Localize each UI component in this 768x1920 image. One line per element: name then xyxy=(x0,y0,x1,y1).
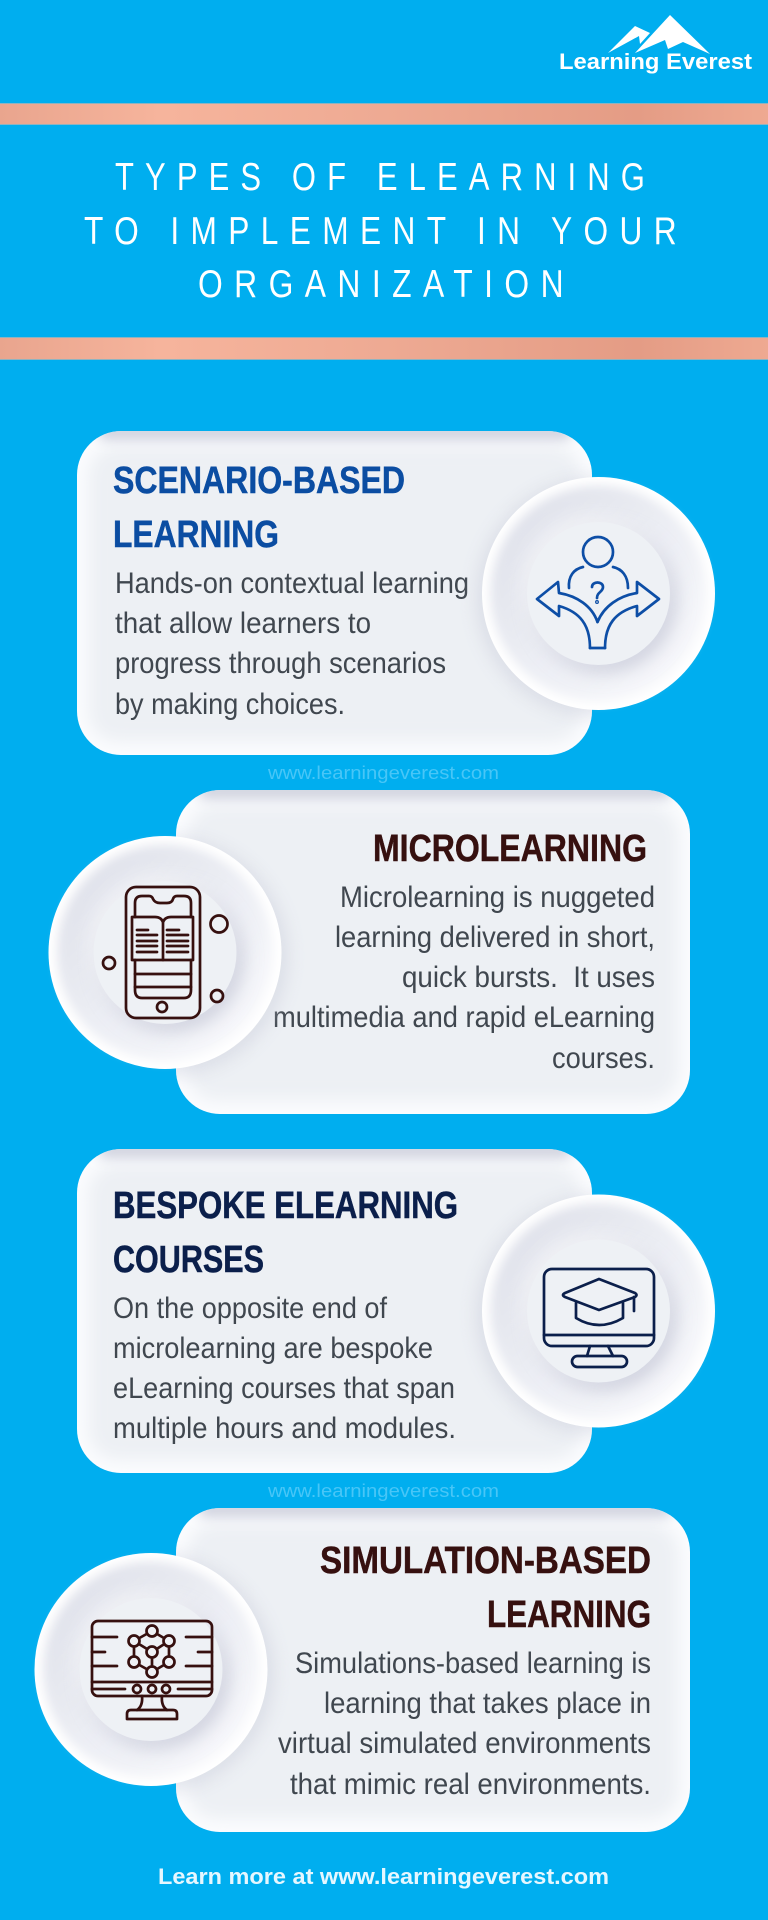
description: virtual simulated environments xyxy=(278,1727,651,1760)
panel: simulation-based learning xyxy=(34,1501,690,1832)
icon: monitor with graduation cap xyxy=(544,1269,654,1367)
heading: BESPOKE ELEARNING xyxy=(113,1185,458,1227)
heading: LEARNING xyxy=(487,1594,651,1636)
card background xyxy=(176,783,690,1114)
description: multimedia and rapid eLearning xyxy=(273,1001,655,1034)
logo: Learning Everest xyxy=(559,15,753,74)
icon: monitor with network cube xyxy=(92,1621,212,1719)
description: that allow learners to xyxy=(115,607,371,640)
top decorative bar xyxy=(0,103,768,125)
footer call to action: Learn more at www.learningeverest.com xyxy=(158,1864,609,1889)
description: learning that takes place in xyxy=(324,1687,651,1720)
icon disc xyxy=(475,477,715,716)
description: quick bursts. It uses xyxy=(402,961,655,994)
description: learning delivered in short, xyxy=(335,921,655,954)
watermark: www.learningeverest.com xyxy=(267,1481,499,1501)
icon disc xyxy=(34,1553,275,1792)
heading xyxy=(113,1185,458,1281)
description: courses. xyxy=(552,1042,655,1075)
heading: LEARNING xyxy=(113,514,279,556)
description xyxy=(278,1647,651,1801)
panel: scenario-based learning xyxy=(77,424,715,755)
description: Hands-on contextual learning xyxy=(115,567,469,600)
panel: microlearning xyxy=(48,783,690,1114)
icon: person at crossroads xyxy=(537,537,659,648)
description xyxy=(113,1292,456,1445)
card background xyxy=(77,424,592,755)
heading: MICROLEARNING xyxy=(373,828,647,870)
description xyxy=(115,567,469,721)
watermark: www.learningeverest.com xyxy=(267,763,499,783)
card background xyxy=(77,1142,592,1473)
logo wordmark: Learning Everest xyxy=(559,49,753,74)
description: Simulations-based learning is xyxy=(295,1647,651,1680)
icon disc xyxy=(475,1194,715,1434)
heading xyxy=(113,460,405,556)
description: eLearning courses that span xyxy=(113,1372,455,1405)
description: by making choices. xyxy=(115,688,345,721)
description: multiple hours and modules. xyxy=(113,1412,456,1445)
title xyxy=(84,156,688,306)
icon: phone with open book xyxy=(103,887,228,1018)
heading: SIMULATION-BASED xyxy=(320,1540,651,1582)
description: On the opposite end of xyxy=(113,1292,388,1325)
heading xyxy=(320,1540,651,1636)
title: ORGANIZATION xyxy=(198,263,575,306)
description: microlearning are bespoke xyxy=(113,1332,433,1365)
heading: SCENARIO-BASED xyxy=(113,460,405,502)
card background xyxy=(176,1501,690,1832)
icon: mountains xyxy=(608,15,710,54)
description: progress through scenarios xyxy=(115,647,446,680)
heading: COURSES xyxy=(113,1239,264,1281)
description: that mimic real environments. xyxy=(290,1768,651,1801)
description xyxy=(273,881,655,1075)
icon disc xyxy=(48,836,289,1075)
panel: bespoke elearning courses xyxy=(77,1142,715,1473)
description: Microlearning is nuggeted xyxy=(340,881,655,914)
bottom decorative bar xyxy=(0,337,768,360)
